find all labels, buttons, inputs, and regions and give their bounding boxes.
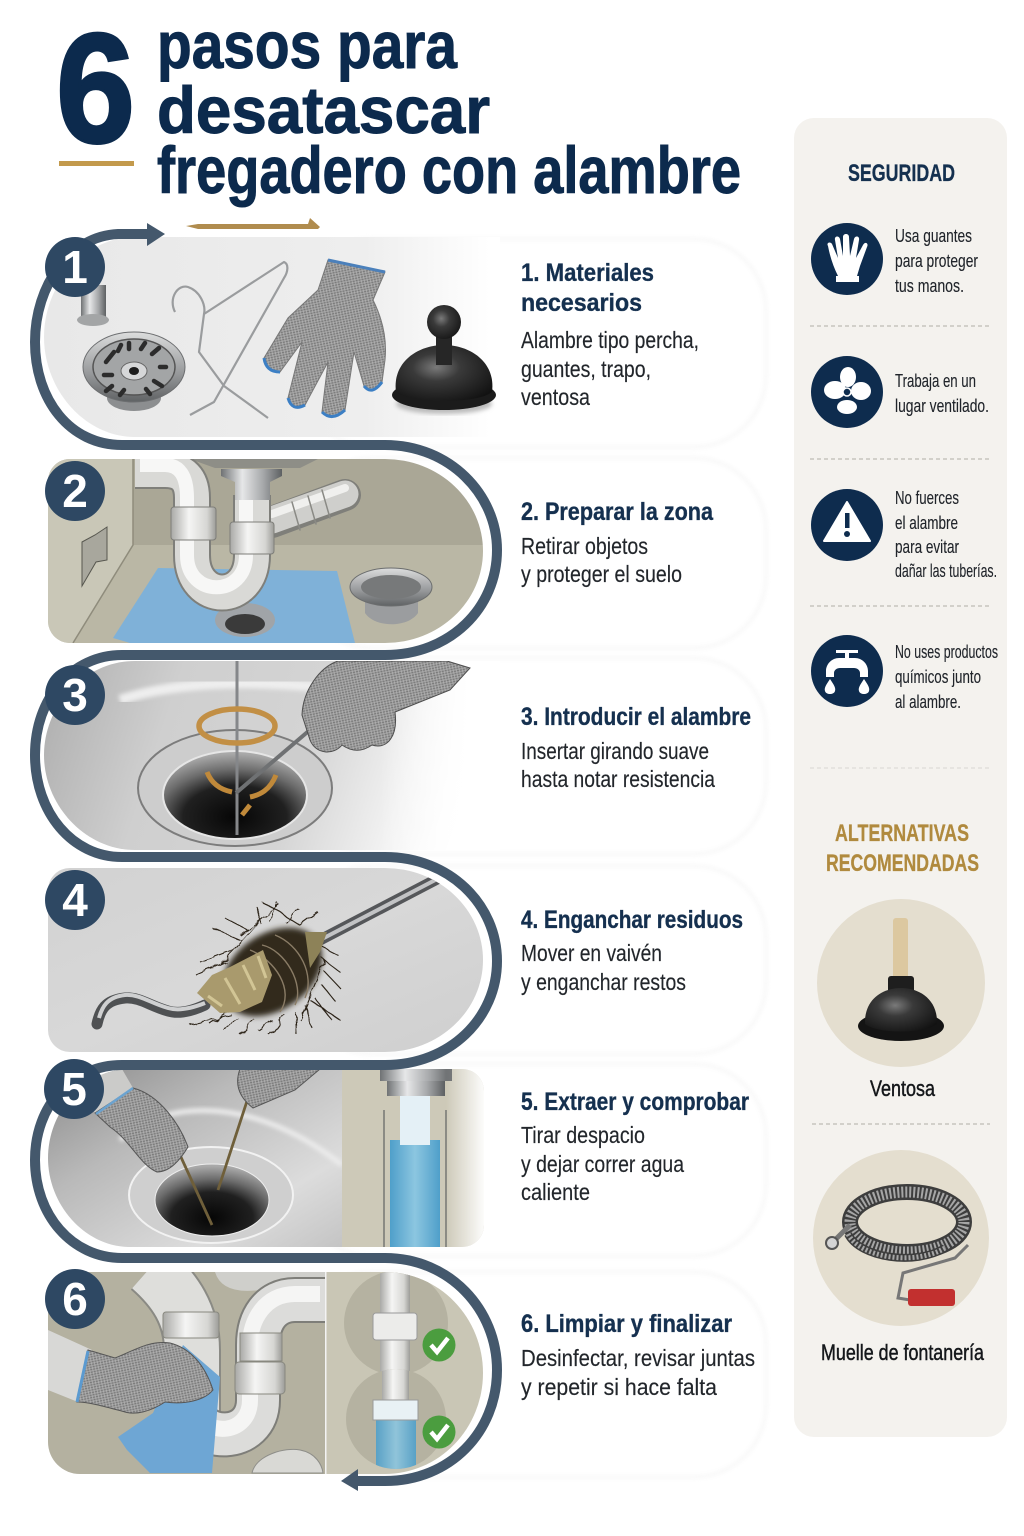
safety text 1: para proteger [895, 250, 978, 271]
faucet stub [77, 285, 109, 326]
check panel [326, 1272, 486, 1474]
safety text 4: químicos junto [895, 666, 981, 687]
panel: step 1 image [40, 237, 500, 437]
step 5 text: y dejar correr agua [521, 1151, 684, 1177]
sink underside [215, 1272, 325, 1291]
white divider [325, 1272, 326, 1474]
title text: desatascar [157, 73, 490, 147]
gold collar [305, 932, 327, 968]
step 1 text: ventosa [521, 384, 590, 410]
strainer [83, 332, 185, 411]
step 6 text: 6. Limpiar y finalizar [521, 1310, 732, 1338]
drain [129, 1147, 293, 1243]
pipe collars [171, 507, 274, 554]
badge 1 [45, 237, 105, 297]
step 3 text: Insertar girando suave [521, 738, 709, 764]
text card outlines [300, 239, 766, 1477]
badge 4: 4 [62, 874, 88, 926]
gold clump [197, 950, 272, 1013]
drain on cloth [215, 603, 275, 637]
vertical wire [236, 661, 238, 835]
cabinet side wall [48, 459, 133, 643]
badge 3 [45, 665, 105, 725]
hair strands [250, 935, 308, 1012]
step 6 text: Desinfectar, revisar juntas [521, 1345, 755, 1371]
coil tip [826, 1225, 850, 1249]
rotation arrows [207, 772, 276, 815]
safety text 2 [895, 370, 989, 416]
heading: alternativas: ALTERNATIVAS [835, 820, 969, 847]
P-trap [150, 1268, 325, 1434]
title text: pasos para [157, 8, 458, 82]
arrow head end [341, 1469, 358, 1491]
badge 5 [44, 1059, 104, 1119]
water tube panel [342, 1068, 484, 1247]
title [56, 2, 741, 207]
knit glove [264, 260, 386, 417]
coil [848, 1192, 964, 1258]
step 4 text: 4. Enganchar residuos [521, 906, 743, 934]
step 5 text: Tirar despacio [521, 1122, 645, 1148]
step 2 text: Retirar objetos [521, 533, 648, 559]
inspection circle top [344, 1270, 448, 1380]
badge 6 [45, 1269, 105, 1329]
crank and handle [898, 1245, 968, 1300]
safety text 3: para evitar [895, 536, 959, 557]
parts on floor [252, 1449, 323, 1473]
step 1 text: Alambre tipo percha, [521, 327, 699, 353]
panel: step 3 image [40, 661, 500, 850]
check mark 2 [422, 1416, 456, 1448]
step 1 text: guantes, trapo, [521, 356, 651, 382]
icon: fan [811, 356, 883, 428]
pipe collars [163, 1312, 285, 1394]
safety text 3: No fuerces [895, 487, 959, 508]
gloved hand [77, 1342, 213, 1413]
step number badges [44, 237, 105, 1329]
arm sleeve [48, 1330, 92, 1402]
step 2 text: y proteger el suelo [521, 561, 682, 587]
badge 5: 5 [61, 1063, 87, 1115]
icon: faucet with drops [811, 635, 883, 707]
sink underside [190, 459, 318, 468]
step 3 text: 3. Introducir el alambre [521, 703, 751, 731]
heading: alternativas [826, 820, 979, 877]
sink highlight [120, 683, 350, 700]
coil highlights [208, 956, 266, 1006]
drain connector [221, 469, 282, 500]
panel: step 6 image [48, 1268, 486, 1474]
alternative: plumbing spring [813, 1150, 989, 1326]
safety text 1: Usa guantes [895, 225, 972, 246]
rotation ring [199, 709, 275, 743]
check mark 1 [422, 1328, 456, 1362]
safety text 1: tus manos. [895, 275, 964, 296]
safety text 1 [895, 225, 978, 296]
right glove [238, 1069, 320, 1108]
step 5 text: caliente [521, 1179, 590, 1205]
safety text 3 [895, 487, 997, 581]
safety text 2: Trabaja en un [895, 370, 976, 391]
hair mass [190, 900, 342, 1036]
step 3 text [521, 703, 751, 792]
safety text 2: lugar ventilado. [895, 395, 989, 416]
inspection circle bottom [346, 1369, 446, 1470]
safety text 4 [895, 641, 998, 712]
auger wire with hook [97, 877, 441, 1024]
step 5 text: 5. Extraer y comprobar [521, 1088, 749, 1116]
drain [138, 730, 332, 846]
safety text 4: al alambre. [895, 691, 961, 712]
gold underline [59, 161, 134, 166]
title text: fregadero con alambre [157, 133, 741, 207]
title text [157, 8, 741, 207]
step 1 text: 1. Materiales [521, 259, 654, 287]
gold arrow accent [186, 218, 320, 229]
big number 6: 6 [56, 2, 135, 176]
panel: step 5 image [48, 1068, 484, 1247]
panel: sidebar [794, 118, 1007, 1437]
icon: warning [811, 489, 883, 561]
step 5 text [521, 1088, 749, 1205]
plunger [392, 305, 496, 414]
step 1 text [521, 259, 699, 410]
badge 2 [45, 461, 105, 521]
icon: glove [811, 223, 883, 295]
badge 4 [45, 870, 105, 930]
step 1 text: necesarios [521, 289, 642, 317]
snake flow line [35, 234, 497, 1481]
heading: seguridad: SEGURIDAD [848, 160, 955, 187]
badge 6: 6 [62, 1273, 88, 1325]
step 2 text: 2. Preparar la zona [521, 498, 714, 526]
wire with residue [180, 1098, 248, 1225]
arrow head start [147, 223, 165, 246]
safety text 3: el alambre [895, 512, 958, 533]
side corrugated pipe [272, 488, 345, 530]
gloved hand [236, 661, 470, 793]
badge 2: 2 [62, 465, 88, 517]
panel: step 4 image [48, 868, 483, 1052]
step 4 text [521, 906, 743, 995]
blue rag [118, 1345, 220, 1473]
badge 1: 1 [62, 241, 88, 293]
panel: step 2 image [48, 459, 483, 643]
side strainer [350, 568, 432, 624]
alternative: plunger [817, 899, 985, 1067]
sink highlight [120, 1110, 342, 1165]
P-trap pipes [135, 465, 252, 592]
wall bracket [82, 527, 107, 586]
left glove [94, 1070, 188, 1172]
step 4 text: y enganchar restos [521, 969, 686, 995]
step 6 text [521, 1310, 755, 1400]
step 4 text: Mover en vaivén [521, 940, 662, 966]
wire hanger [173, 262, 287, 418]
fade edge [446, 1069, 484, 1247]
label: muelle de fontanería: Muelle de fontanería [821, 1340, 985, 1365]
badge 3: 3 [62, 669, 88, 721]
step 6 text: y repetir si hace falta [521, 1374, 717, 1400]
label: ventosa: Ventosa [870, 1076, 936, 1101]
step 3 text: hasta notar resistencia [521, 766, 715, 792]
blue cloth [113, 568, 355, 643]
step 2 text [521, 498, 714, 587]
steel sink [48, 1069, 342, 1247]
